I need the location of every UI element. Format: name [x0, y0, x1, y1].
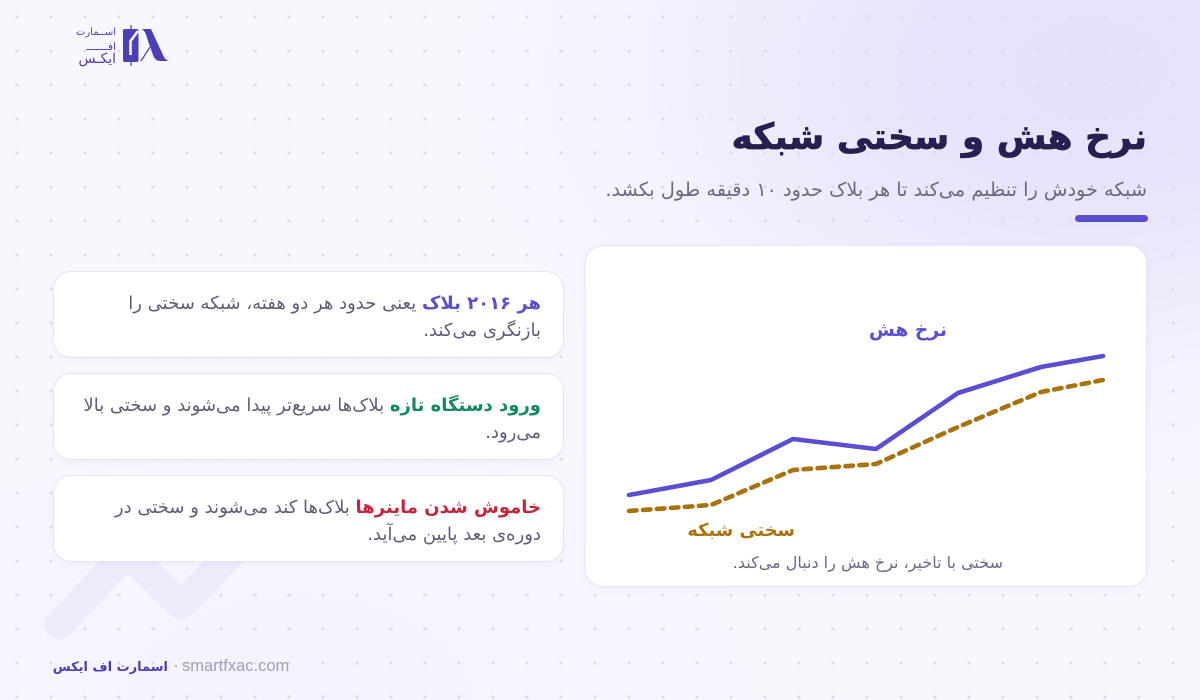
- label: hash rate: نرخ هش: [869, 320, 947, 341]
- label: difficulty: سختی شبکه: [687, 520, 795, 541]
- card 3 text: خاموش شدن ماینرها بلاک‌ها کند می‌شوند و سختی در: [115, 497, 541, 518]
- title: نرخ هش و سختی شبکه: [731, 117, 1147, 158]
- panel: card 2: [53, 373, 564, 460]
- card 1 text: هر ۲۰۱۶ بلاک یعنی حدود هر دو هفته، شبکه سختی را: [128, 293, 541, 314]
- logo: [76, 25, 169, 67]
- footer brand: اسمارت اف ایکس: [53, 660, 168, 675]
- chart caption: سختی با تاخیر، نرخ هش را دنبال می‌کند.: [733, 553, 1003, 572]
- panel: chart: [585, 245, 1147, 587]
- subtitle: شبکه خودش را تنظیم می‌کند تا هر بلاک حدود ۱۰ دقیقه طول بکشد.: [605, 178, 1147, 201]
- footer website: smartfxac.com: [182, 657, 289, 675]
- hash rate line: [629, 356, 1103, 495]
- footer: [53, 657, 289, 675]
- card 2 text: ورود دستگاه تازه بلاک‌ها سریع‌تر پیدا می‌شوند و سختی بالا: [83, 395, 541, 416]
- logo wordmark line 2: افـــــــ: [87, 41, 116, 53]
- difficulty line: [629, 380, 1103, 511]
- panel: card 3: [53, 475, 564, 562]
- panel: card 1: بازنگری می‌کند.: [423, 320, 541, 341]
- logo wordmark line 1: اســمارت: [76, 27, 116, 38]
- logo mark: [123, 25, 169, 66]
- panel: card 1: [53, 271, 564, 358]
- panel: card 2: می‌رود.: [485, 422, 541, 443]
- panel: card 3: دوره‌ی بعد پایین می‌آید.: [367, 524, 541, 545]
- accent bar: [1075, 215, 1148, 222]
- logo wordmark line 3: ایکـس: [79, 51, 116, 67]
- footer separator dot: [175, 665, 177, 667]
